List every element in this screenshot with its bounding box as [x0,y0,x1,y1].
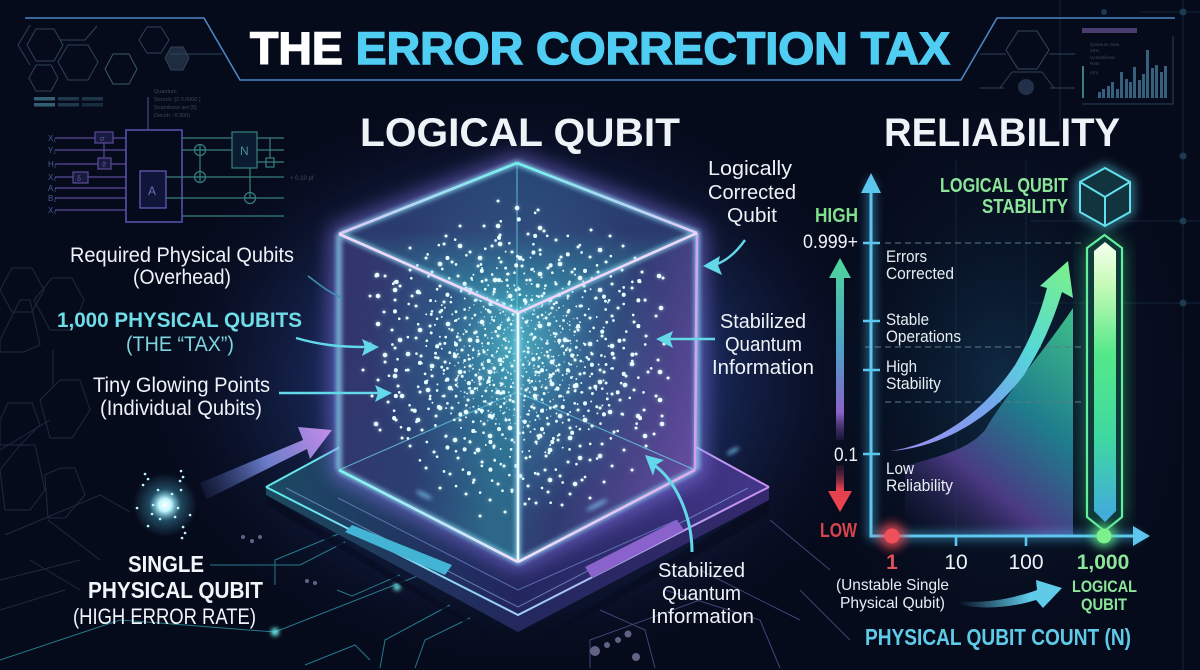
y axis and x axis [871,190,1135,536]
label: logical qubit x axis: QUBIT [1081,595,1128,614]
x axis values: 100 [1008,551,1044,574]
grid dashed lines [865,243,1085,402]
label: stabilized quantum information bottom [651,560,754,628]
arrow: stabilized bottom [645,455,692,552]
circuit traces [0,525,470,668]
arrow: tiny points to cube [279,385,392,402]
label: stabilized quantum information bottom: Quantum [662,583,741,605]
area under curve [905,308,1073,536]
label: logical qubit stability [940,175,1069,218]
label: stabilized quantum information bottom: Information [651,606,754,628]
chart annotations: Errors [886,247,927,266]
cube left face [339,234,518,562]
quantum circuit diagram: ϑ [102,162,106,169]
label: 1,000 physical qubits: 1,000 PHYSICAL QUBITS [57,309,302,332]
logical qubit bar outer [1087,235,1122,531]
x axis values: 1 [886,551,898,574]
high arrow [829,258,851,440]
qubit dots [363,201,668,516]
low arrow [828,465,852,512]
mini data chart top right: Unstabilized [1090,55,1115,60]
title: THE ERROR CORRECTION TAX [250,23,950,74]
label: single physical qubit: (HIGH ERROR RATE) [73,604,256,629]
quantum circuit diagram [48,97,314,222]
quantum circuit diagram: N [240,144,249,158]
chart annotations [886,247,961,495]
label: stabilized quantum information right [712,311,814,379]
central dot cloud [422,252,611,460]
label: logical qubit x axis [1072,577,1137,614]
cube edge glow [339,163,697,562]
y axis labels: LOW [820,520,857,542]
arrow: single to logical [958,580,1062,608]
title frame [25,18,1175,80]
quantum circuit diagram: B₂ [48,194,56,203]
platform connector right [585,520,684,578]
cube glow [339,163,697,562]
decorative hexagons top left [18,25,222,91]
label: logical qubit stability: LOGICAL QUBIT [940,175,1068,197]
quantum circuit diagram: X₂ [48,173,56,182]
denser dot cloud mirrored [389,213,651,503]
label: logically corrected qubit: Qubit [727,205,777,227]
arrow: single qubit to cube [200,427,332,499]
chart annotations: Reliability [886,476,953,495]
label: tiny glowing points: Tiny Glowing Points [93,374,270,397]
quantum circuit diagram: δ [77,176,81,183]
quantum circuit diagram: Y₁ [48,146,56,155]
platform [266,345,769,655]
quantum circuit diagram: A [148,184,156,198]
inner dot cloud [455,284,583,429]
cube top face [339,163,697,313]
y axis labels [803,205,858,542]
chart annotations: Stability [886,374,941,393]
label: single physical qubit: SINGLE [128,551,204,577]
quantum circuit diagram: σ [100,136,105,143]
label: unstable single physical qubit [836,577,949,612]
platform light streaks [415,446,740,512]
label: stabilized quantum information bottom: Stabilized [658,560,745,582]
x axis values: 10 [944,551,968,574]
axis ticks [863,243,1026,546]
y axis labels: HIGH [815,205,858,227]
label: logically corrected qubit: Corrected [708,182,796,204]
circuit traces right of platform [590,520,850,668]
label: single physical qubit [73,551,263,629]
platform connector left [345,525,452,575]
red dot [879,523,905,549]
cube right face [518,233,697,562]
x axis values: 1,000 [1077,551,1129,574]
label: unstable single physical qubit: Physical Qubit) [840,595,945,612]
axes glow [871,180,1140,536]
readout text: Soroch: [2 0.0000 ] [154,97,201,103]
section heading: logical qubit: LOGICAL QUBIT [360,111,680,155]
chart annotations: Corrected [886,264,954,283]
label: unstable single physical qubit: (Unstable Single [836,577,949,594]
chart annotations: Low [886,459,915,478]
quantum circuit diagram: X₂ [48,206,56,215]
label: logically corrected qubit: Logically [708,158,792,180]
quantum circuit diagram: X₁ [48,134,56,143]
platform pads [241,535,640,661]
quantum circuit diagram: A₃ [48,184,57,193]
section heading: reliability: RELIABILITY [884,111,1120,155]
label: logical qubit x axis: LOGICAL [1072,577,1137,596]
arrow: tax to cube [296,338,379,356]
label: tiny glowing points [93,374,270,420]
cube front edges [339,163,697,562]
label: logical qubit stability: STABILITY [982,196,1069,218]
icon: small cube [1080,168,1130,226]
readout text [154,89,201,119]
label: tiny glowing points: (Individual Qubits) [100,397,262,420]
mini data chart top right: Σ0% [1090,48,1099,53]
green dot [1092,524,1116,548]
mini data chart top right: σ(n) [1090,70,1099,75]
status bars top left [34,97,103,106]
quantum circuit diagram: + 0.10 pf [290,176,314,182]
dot halo [363,201,668,516]
x axis title: PHYSICAL QUBIT COUNT (N) [865,624,1131,650]
label: required physical qubits [70,244,294,289]
quantum circuit diagram: H₁ [48,160,57,169]
readout text: Scambose set [5] [154,105,197,111]
mini data chart top right: Quantum Data [1090,42,1120,47]
readout text: Decoh : 0.900) [154,113,190,119]
label: 1,000 physical qubits: (THE “TAX”) [126,333,234,356]
bar glow [1087,235,1122,531]
chart annotations: High [886,357,917,376]
chart annotations: Stable [886,310,929,329]
label: logically corrected qubit [708,158,796,227]
readout text: Quantum [154,89,177,95]
label: single physical qubit: PHYSICAL QUBIT [88,577,263,603]
label: required physical qubits: Required Physical Qubits [70,244,294,267]
y axis labels: 0.999+ [803,232,858,253]
logical qubit cube [339,163,697,562]
y axis arrowhead [861,173,881,193]
decorative hexagon top right [980,31,1075,95]
decorative hexagons left edge [0,268,130,610]
y axis labels: 0.1 [834,445,858,466]
cube inner back lines [339,163,695,470]
arrow: logically corrected qubit [703,240,745,275]
chart annotations: Operations [886,327,961,346]
x axis values [886,551,1129,574]
mini data chart top right: Rate [1090,61,1100,66]
logical qubit bar inner [1094,242,1116,522]
x axis arrowhead [1133,526,1150,546]
core glow [368,175,668,515]
mini data chart top right [1082,28,1173,104]
label: 1,000 physical qubits [57,309,302,356]
label: required physical qubits: (Overhead) [133,266,231,289]
icon: single physical qubit [133,471,197,538]
label: stabilized quantum information right: Quantum [725,334,802,356]
label: stabilized quantum information right: Information [712,357,814,379]
reliability chart [861,173,1150,549]
label: stabilized quantum information right: Stabilized [720,311,806,333]
trace glow nodes [271,584,400,636]
arrow: stabilized right [656,331,715,348]
reliability curve arrow [890,261,1073,451]
arrow: overhead pointer [308,276,342,298]
